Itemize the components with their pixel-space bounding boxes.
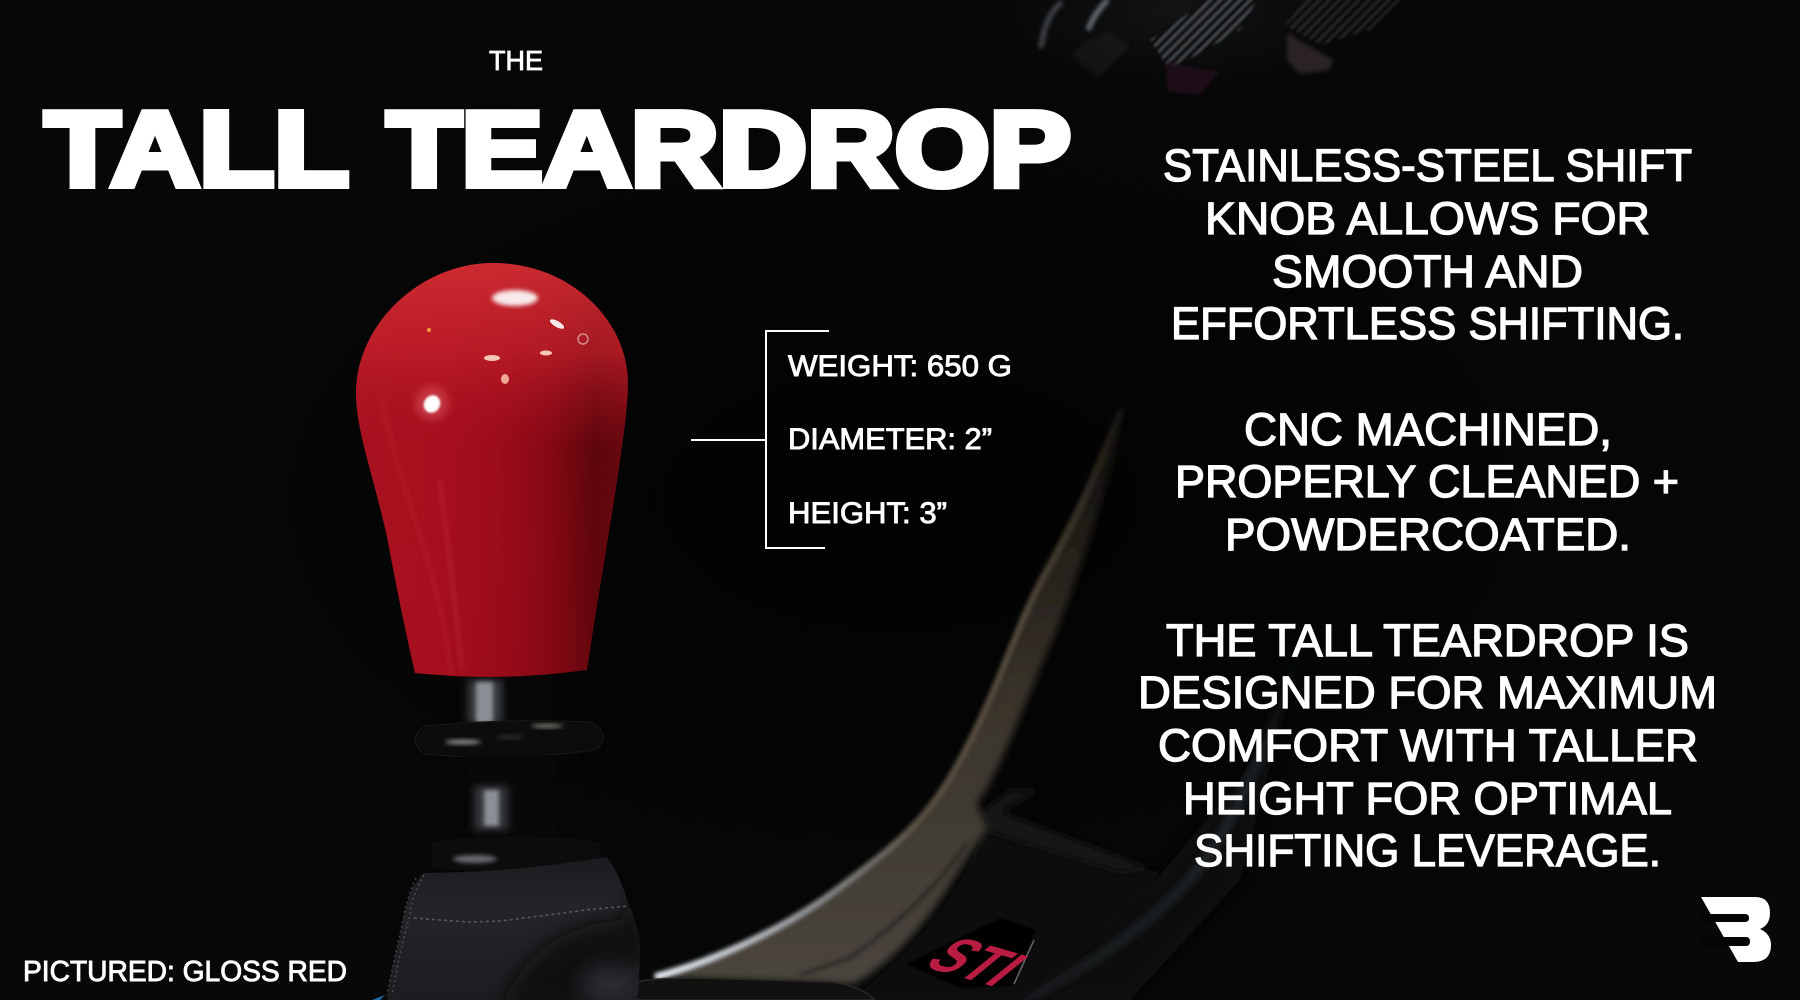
paragraph: comfort and leverage: HEIGHT FOR OPTIMAL [1183, 773, 1672, 824]
caption: pictured finish: PICTURED: GLOSS RED [23, 956, 347, 988]
spec: weight: WEIGHT: 650 G [788, 350, 1012, 383]
paragraph: comfort and leverage [1138, 615, 1717, 876]
collar and shaft [415, 676, 603, 871]
paragraph: stainless steel: EFFORTLESS SHIFTING. [1171, 298, 1684, 349]
paragraph: CNC machined: CNC MACHINED, [1244, 404, 1612, 455]
title: TALL TEARDROP: TALL [45, 90, 349, 208]
spec: diameter: DIAMETER: 2” [788, 423, 992, 456]
paragraph: comfort and leverage: DESIGNED FOR MAXIMUM [1138, 667, 1717, 718]
paragraph: stainless steel [1163, 140, 1692, 349]
title: TALL TEARDROP [45, 90, 1071, 208]
steering wheel rim, blue-grey arc at right [1020, 650, 1300, 1000]
specs list [788, 350, 1012, 530]
red teardrop knob [350, 255, 635, 685]
paragraph: CNC machined: POWDERCOATED. [1225, 509, 1631, 560]
shift knob photo [350, 255, 650, 1000]
spec: height: HEIGHT: 3” [788, 497, 947, 530]
heading: THE: THE [489, 45, 543, 76]
paragraph: comfort and leverage: SHIFTING LEVERAGE. [1194, 825, 1661, 876]
lower right wheel surface, soft [1010, 690, 1290, 1000]
paragraph: CNC machined [1175, 404, 1679, 560]
grey spoke wedge [982, 790, 1150, 872]
spec bracket [691, 331, 829, 548]
paragraph: stainless steel: SMOOTH AND [1272, 246, 1583, 297]
highlight along band edge [655, 410, 1120, 977]
paragraph: comfort and leverage: COMFORT WITH TALLER [1158, 720, 1698, 771]
description text column [1138, 140, 1717, 876]
paragraph: stainless steel: STAINLESS-STEEL SHIFT [1163, 140, 1692, 191]
silver shifter-surround band [653, 408, 1127, 984]
paragraph: stainless steel: KNOB ALLOWS FOR [1205, 193, 1650, 244]
blurred carbon-fibre controls at top of photo [950, 0, 1410, 105]
icon: brand logo [1700, 897, 1771, 962]
leather shift boot [372, 857, 650, 1000]
dark console piece at bottom [625, 978, 875, 1000]
dark spoke surface behind badge [850, 828, 1160, 1000]
paragraph: CNC machined: PROPERLY CLEANED + [1175, 456, 1679, 507]
title: TALL TEARDROP: TEARDROP [387, 90, 1071, 208]
paragraph: comfort and leverage: THE TALL TEARDROP IS [1166, 615, 1689, 666]
icon: STI badge: STI [910, 927, 1043, 997]
shadow seam on lower band [800, 842, 968, 975]
